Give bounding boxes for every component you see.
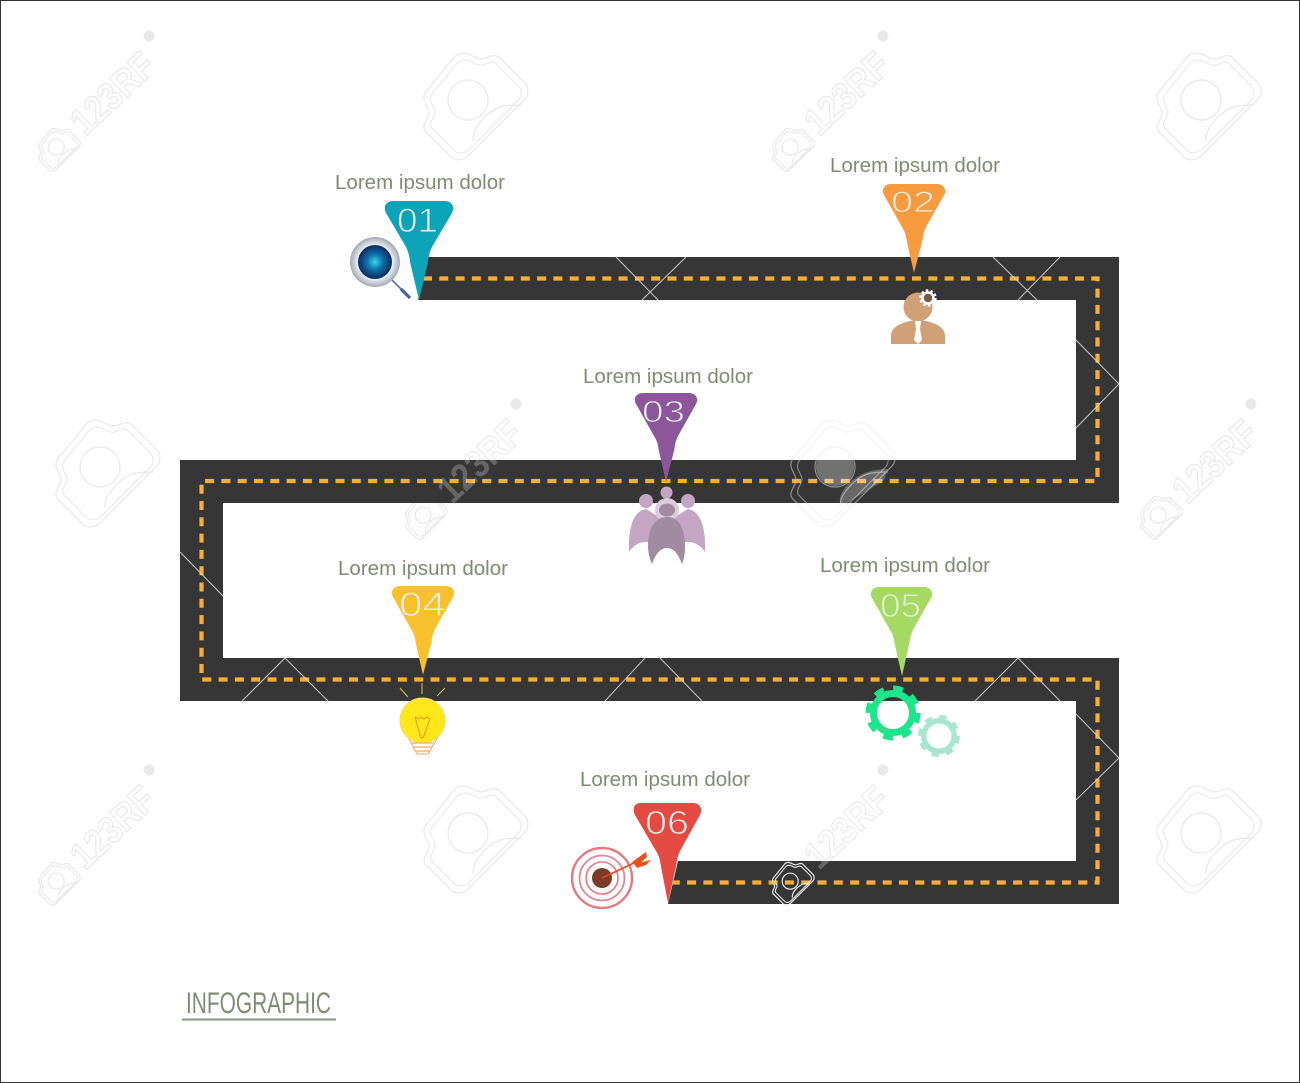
step 6 pin: 06 <box>645 804 689 841</box>
step 4 label: Lorem ipsum dolor <box>338 558 508 580</box>
watermark logo fills over road: 123RF <box>429 413 531 512</box>
step 3 label: Lorem ipsum dolor <box>583 366 753 388</box>
step 4 pin <box>392 586 454 675</box>
watermark logos: 123RF <box>62 779 164 878</box>
step 5 icon: large gear <box>868 688 918 738</box>
watermark logos: 123RF <box>1164 413 1266 512</box>
step 2 icon: business person <box>891 290 945 344</box>
step 1 pin <box>385 201 453 300</box>
footer title: INFOGRAPHIC: INFOGRAPHIC <box>186 987 331 1020</box>
step 6 pin <box>634 803 701 903</box>
step 1 pin: 01 <box>397 202 438 240</box>
watermark logos: 123RF <box>62 45 164 144</box>
watermark logo fills over road <box>429 413 898 905</box>
step 5 pin <box>871 587 932 676</box>
step 2 pin <box>883 184 945 273</box>
watermark logos: 123RF <box>429 413 531 512</box>
step 5 icon: small gear <box>920 717 958 755</box>
step 2 label: Lorem ipsum dolor <box>830 155 1000 177</box>
step 3 pin <box>635 393 697 482</box>
road <box>180 257 1119 904</box>
step 5 label: Lorem ipsum dolor <box>820 555 990 577</box>
step 1 icon: magnifying glass <box>350 237 410 298</box>
step 4 icon: light bulb <box>400 683 445 754</box>
watermark eggs <box>56 53 1261 893</box>
step 6 label: Lorem ipsum dolor <box>580 769 750 791</box>
watermark logos <box>39 30 1266 905</box>
watermark logo fills over road: 123RF <box>796 779 898 878</box>
watermark tile lines on road <box>180 257 1119 800</box>
road centre dashed line <box>202 278 1098 882</box>
step 6 icon: target with arrow <box>572 848 651 908</box>
step 3 pin: 03 <box>642 394 685 429</box>
watermark logos: 123RF <box>796 45 898 144</box>
step 5 pin: 05 <box>880 587 921 624</box>
step 4 pin: 04 <box>399 586 446 624</box>
step 2 pin: 02 <box>891 186 935 219</box>
step 1 label: Lorem ipsum dolor <box>335 172 505 194</box>
watermark logos: 123RF <box>796 779 898 878</box>
step 3 icon: team of people <box>629 486 705 564</box>
